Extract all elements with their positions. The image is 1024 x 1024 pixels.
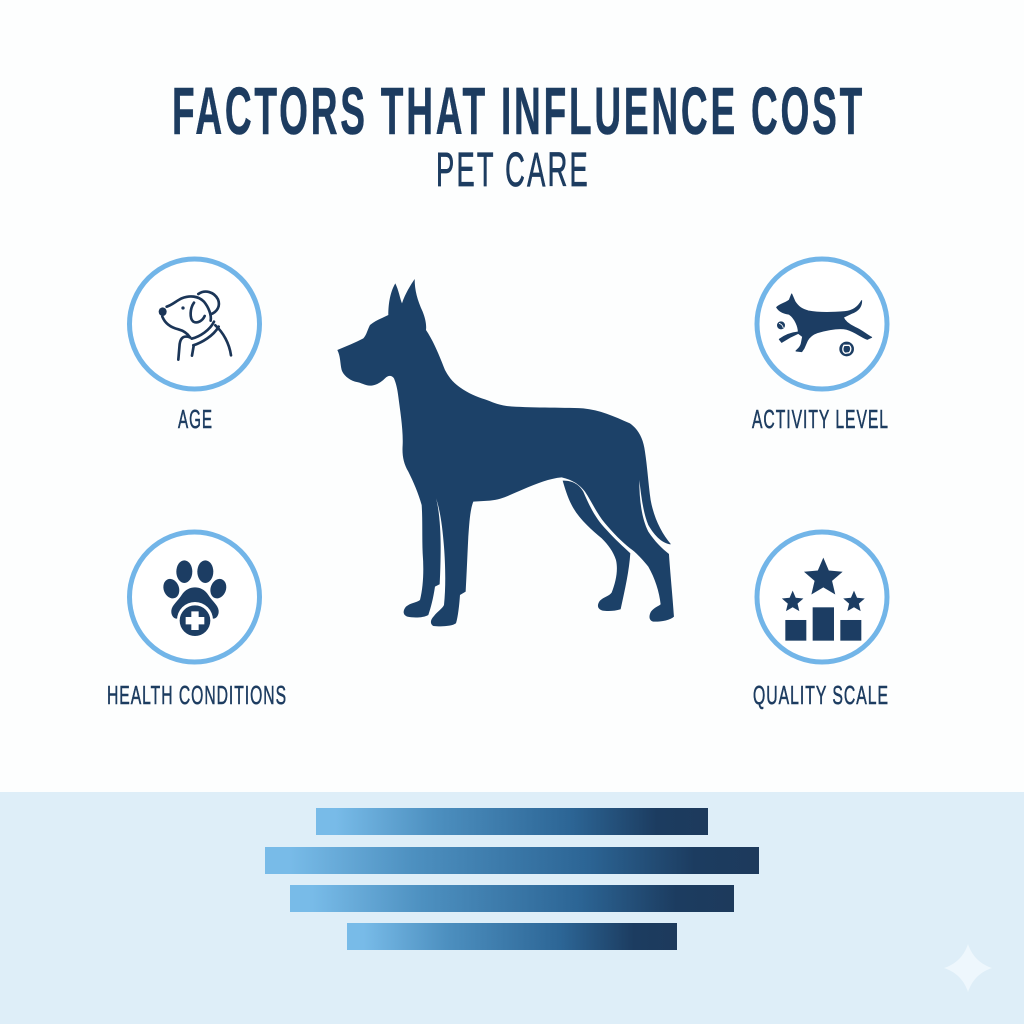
- subtitle: PET CARE: [436, 144, 590, 197]
- central dog silhouette: [337, 279, 674, 626]
- near body and legs: [337, 279, 674, 626]
- age label: AGE: [178, 404, 213, 434]
- bar 2: [265, 847, 759, 874]
- bar 4: [347, 923, 677, 950]
- icon: senior dog head: [159, 292, 231, 360]
- activity ring: [757, 259, 887, 389]
- factor: quality scale: [753, 532, 889, 710]
- icon: paw with medical cross: [161, 560, 229, 638]
- factor: health conditions: [107, 532, 287, 710]
- bar 3: [290, 885, 734, 912]
- icon: stars over podium: [782, 558, 865, 641]
- age ring: [130, 259, 260, 389]
- quality label: QUALITY SCALE: [753, 680, 889, 710]
- quality ring: [757, 532, 887, 662]
- health label: HEALTH CONDITIONS: [107, 680, 287, 710]
- icon: running dog with balls: [777, 294, 872, 356]
- bottom band with gradient bars: [0, 792, 1024, 1024]
- far hind leg: [563, 481, 630, 611]
- factor: age: [130, 259, 260, 434]
- bar 1: [316, 808, 708, 835]
- activity label: ACTIVITY LEVEL: [752, 404, 889, 434]
- health ring: [130, 532, 260, 662]
- icon: sparkle: [944, 944, 992, 992]
- factor: activity level: [752, 259, 889, 434]
